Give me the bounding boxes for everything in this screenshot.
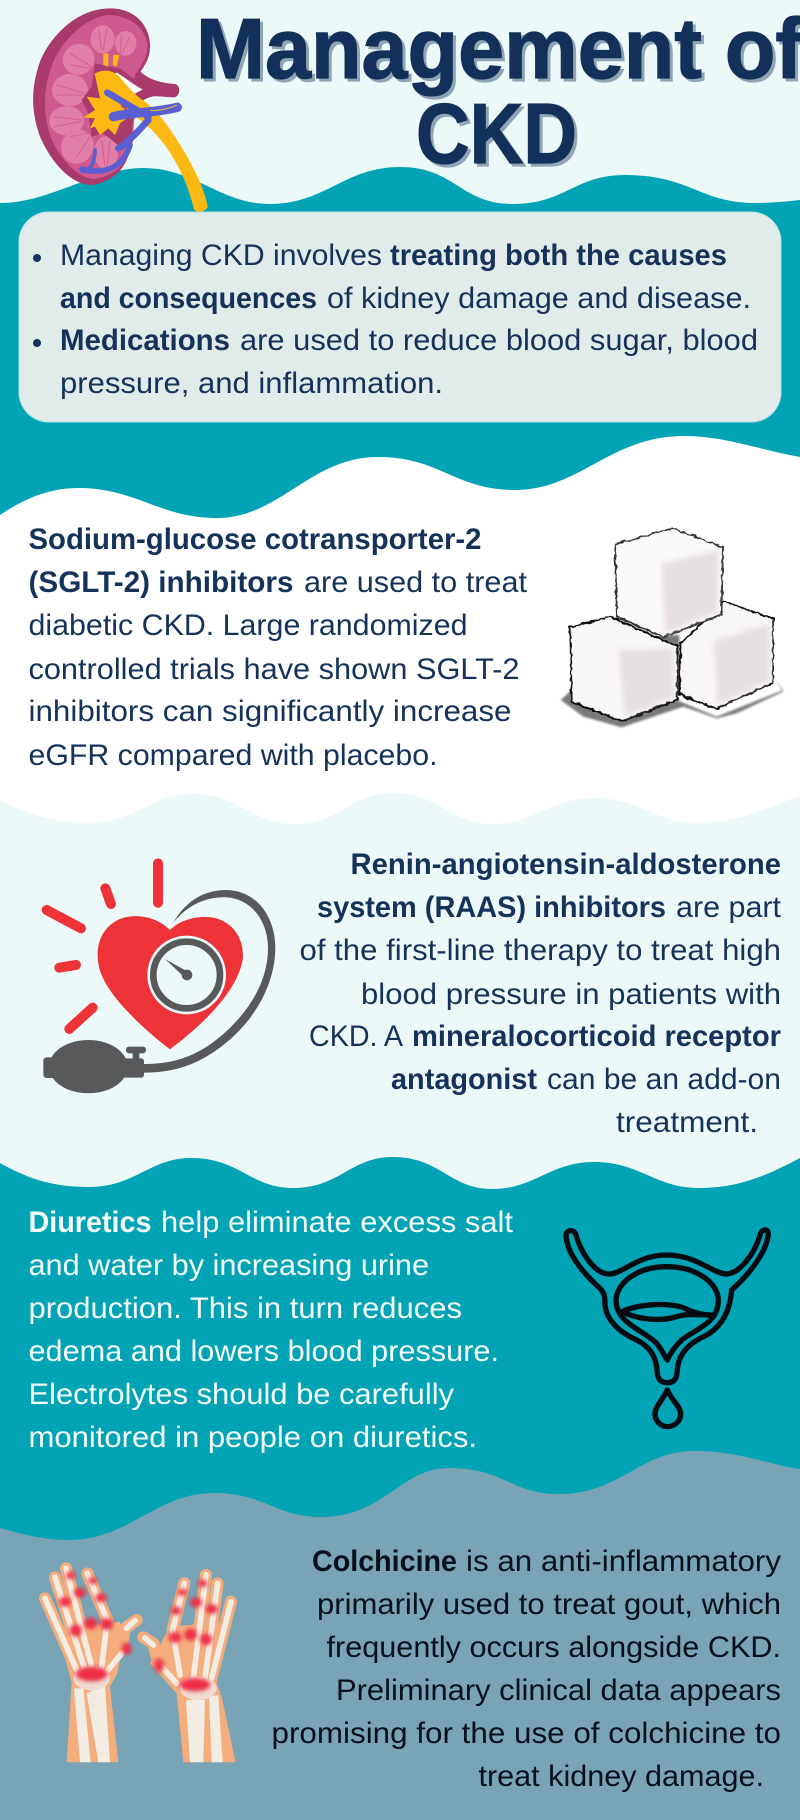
text: intro bullet 1: Managing CKD involves xyxy=(60,239,382,272)
title xyxy=(196,2,800,182)
ureter xyxy=(94,71,208,212)
text: RAAS inhibitors: mineralocorticoid receptor xyxy=(412,1020,781,1053)
text: intro bullet 1 xyxy=(60,239,751,315)
left hand xyxy=(45,1568,137,1762)
text: colchicine: treat kidney damage. xyxy=(478,1760,764,1793)
icon: heart with blood pressure cuff xyxy=(43,863,275,1093)
text: SGLT-2 inhibitors: diabetic CKD. Large randomized xyxy=(28,609,468,642)
text: intro bullet 2: Medications xyxy=(60,324,230,357)
bulb xyxy=(43,1040,146,1093)
text: colchicine: frequently occurs alongside CKD. xyxy=(326,1631,781,1664)
text: intro bullet 1: and consequences xyxy=(60,282,317,315)
text: SGLT-2 inhibitors: Sodium-glucose cotransporter-2 xyxy=(28,523,482,556)
renal pelvis xyxy=(83,53,132,135)
inflamed joints xyxy=(59,1571,218,1691)
text: RAAS inhibitors xyxy=(300,848,782,1139)
heart xyxy=(98,916,243,1049)
text: diuretics: monitored in people on diuretics. xyxy=(28,1421,477,1454)
tube xyxy=(143,890,275,1073)
panel: intro teal wave xyxy=(0,167,800,530)
text: intro bullet 2 xyxy=(60,324,758,400)
top cube xyxy=(614,527,724,638)
icon: kidney xyxy=(33,8,208,212)
cube shadow xyxy=(561,680,783,727)
panel: RAAS section background xyxy=(0,793,800,1200)
text: RAAS inhibitors: are part xyxy=(676,891,782,924)
text: SGLT-2 inhibitors xyxy=(28,523,528,772)
text: colchicine: Preliminary clinical data appears xyxy=(336,1674,781,1707)
right hand xyxy=(143,1575,236,1762)
panel: SGLT-2 section background xyxy=(0,436,800,830)
text: intro bullet 2: are used to reduce blood sugar, blood xyxy=(240,324,758,357)
bullet 2 xyxy=(33,339,41,347)
text: SGLT-2 inhibitors: inhibitors can significantly increase xyxy=(28,695,511,728)
text: SGLT-2 inhibitors: (SGLT-2) inhibitors xyxy=(28,566,294,599)
text: intro bullet 2: pressure, and inflammation. xyxy=(60,367,443,400)
rays xyxy=(47,863,158,1029)
text: RAAS inhibitors: blood pressure in patients with xyxy=(361,978,781,1011)
text: colchicine xyxy=(272,1545,781,1793)
text: intro bullet 1: treating both the causes xyxy=(390,239,727,272)
left cube xyxy=(569,615,678,722)
panel: diuretics section background xyxy=(0,1157,800,1560)
panel: intro card xyxy=(19,212,781,422)
gauge xyxy=(147,936,226,1014)
text: colchicine: promising for the use of colchicine to xyxy=(272,1717,781,1750)
text: RAAS inhibitors: antagonist xyxy=(391,1063,537,1096)
icon: bladder xyxy=(566,1230,768,1427)
text: diuretics: production. This in turn reduces xyxy=(28,1292,462,1325)
text: colchicine: is an anti-inflammatory xyxy=(466,1545,781,1578)
text: RAAS inhibitors: system (RAAS) inhibitors xyxy=(317,891,666,924)
panel: colchicine section background xyxy=(0,1451,800,1820)
icon: sugar cubes xyxy=(561,527,783,727)
panel: header background xyxy=(0,0,800,220)
text: diuretics xyxy=(28,1206,514,1454)
text: diuretics: Diuretics xyxy=(28,1206,152,1239)
text: RAAS inhibitors: treatment. xyxy=(616,1106,758,1139)
title: CKD xyxy=(416,87,577,182)
text: SGLT-2 inhibitors: controlled trials have shown SGLT-2 xyxy=(28,653,520,686)
text: RAAS inhibitors: of the first-line therapy to treat high xyxy=(300,934,781,967)
text: RAAS inhibitors: can be an add-on xyxy=(547,1063,781,1096)
text: colchicine: Colchicine xyxy=(312,1545,457,1578)
vein xyxy=(82,93,177,172)
lobe striations xyxy=(53,28,130,167)
text: RAAS inhibitors: CKD. A xyxy=(309,1020,403,1053)
text: SGLT-2 inhibitors: are used to treat xyxy=(304,566,528,599)
medulla lobes xyxy=(49,25,136,169)
text: colchicine: primarily used to treat gout, which xyxy=(317,1588,781,1621)
text: diuretics: and water by increasing urine xyxy=(28,1249,429,1282)
text: diuretics: Electrolytes should be carefully xyxy=(28,1378,454,1411)
text: diuretics: help eliminate excess salt xyxy=(161,1206,514,1239)
text: diuretics: edema and lowers blood pressure. xyxy=(28,1335,499,1368)
artery xyxy=(95,65,177,112)
icon: arthritic hands xyxy=(45,1568,236,1762)
bullet 1 xyxy=(33,254,41,262)
renal sinus xyxy=(82,63,135,147)
text: SGLT-2 inhibitors: eGFR compared with placebo. xyxy=(28,739,438,772)
text: intro bullet 1: of kidney damage and disease. xyxy=(327,282,751,315)
text: RAAS inhibitors: Renin-angiotensin-aldosterone xyxy=(350,848,781,881)
right cube xyxy=(678,600,774,710)
